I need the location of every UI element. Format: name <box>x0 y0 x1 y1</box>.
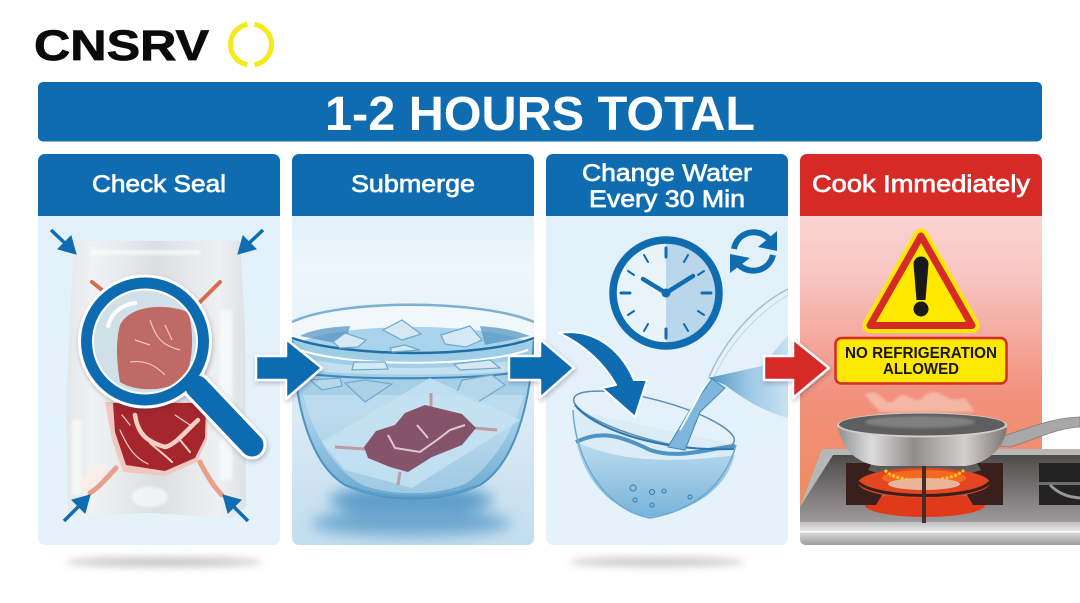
glass bowl <box>569 379 739 518</box>
heading: check seal: Check Seal <box>92 171 226 198</box>
second burner <box>1039 463 1080 505</box>
bag highlights <box>72 250 232 507</box>
panel: change water <box>546 154 790 545</box>
seal tails <box>84 282 222 495</box>
bowl shadow <box>311 484 511 536</box>
logo: CNSRV: CNSRV <box>34 22 209 70</box>
flow arrow 2 <box>509 339 574 398</box>
heading: change water every 30 min: Change Water <box>582 160 752 187</box>
flow arrow 1 <box>256 339 322 399</box>
heading: submerge: Submerge <box>351 171 475 198</box>
sign: no refrigeration allowed: NO REFRIGERATION <box>845 345 997 362</box>
logo: CNSRV <box>34 22 272 70</box>
title banner: 1-2 hours total: 1-2 HOURS TOTAL <box>325 88 755 141</box>
flame glow on cooktop <box>865 493 985 517</box>
water pitcher and stream <box>668 288 790 450</box>
glass bowl with water <box>292 305 534 498</box>
flow arrow 3 <box>764 339 829 398</box>
panel: submerge <box>292 154 534 545</box>
curved arrow <box>559 332 647 417</box>
heading: cook immediately: Cook Immediately <box>812 171 1030 198</box>
icon: clock <box>613 240 719 346</box>
submerged steak <box>335 393 497 485</box>
ground shadow under step 1 <box>66 557 262 567</box>
ground shadow under step 3 <box>569 557 745 567</box>
stove cooktop <box>800 449 1080 545</box>
title banner: 1-2 hours total <box>38 82 1042 142</box>
grate <box>846 463 1003 505</box>
submerged bag <box>322 378 520 488</box>
burner flame <box>858 465 990 523</box>
ice cubes <box>310 320 505 402</box>
icon: warning triangle <box>870 236 972 326</box>
panel: cook immediately <box>800 154 1042 545</box>
raw steak <box>105 402 208 476</box>
panel: check seal <box>38 154 280 545</box>
heading: change water every 30 min <box>582 160 752 213</box>
vacuum bag <box>66 241 246 518</box>
frying pan <box>837 412 1080 466</box>
icon: refresh <box>730 231 777 273</box>
heading: change water every 30 min: Every 30 Min <box>589 186 745 213</box>
magnifying glass <box>78 274 252 445</box>
sign: no refrigeration allowed: ALLOWED <box>883 361 959 378</box>
steam <box>865 392 975 412</box>
seal arrows <box>51 230 263 521</box>
sign: no refrigeration allowed <box>836 338 1006 384</box>
